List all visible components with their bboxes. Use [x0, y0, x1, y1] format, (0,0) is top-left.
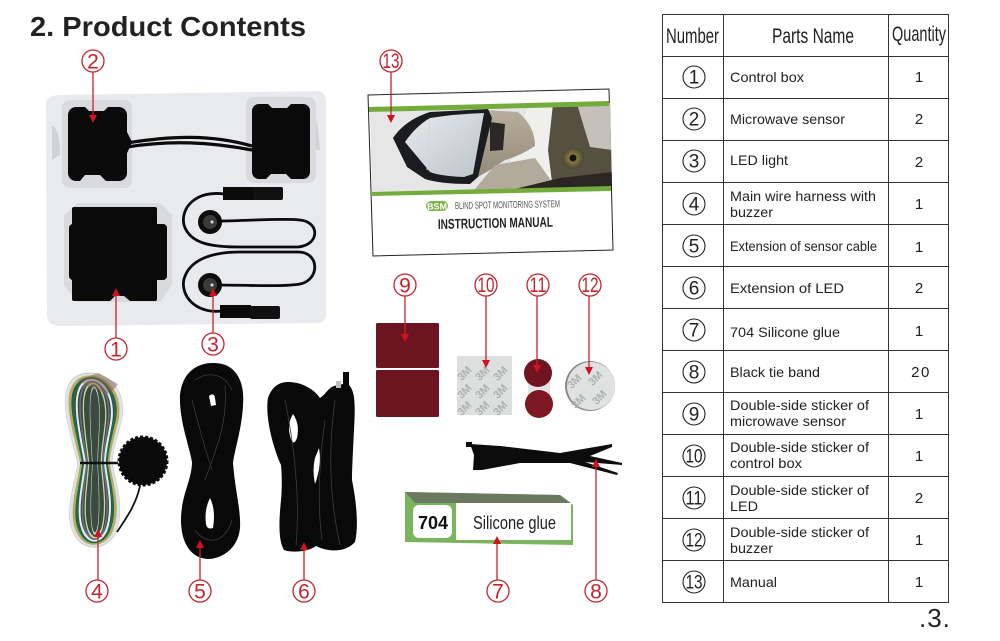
callout 1: 1 [110, 338, 122, 362]
manual sheet [368, 89, 613, 256]
callout 2 [82, 50, 104, 74]
parts name column: Double-side sticker of [730, 482, 869, 498]
callout 9: 9 [399, 274, 411, 298]
numbered callouts [82, 50, 607, 604]
sticker 10: double-side sticker for control box: 3M [491, 364, 511, 384]
arrow 2 [89, 72, 97, 123]
sticker 10: double-side sticker for control box [455, 356, 512, 419]
BSM badge: BSM [427, 201, 447, 212]
part: microwave sensor pair [68, 104, 310, 181]
number column: 5 [689, 236, 699, 258]
number column: 10 [686, 446, 702, 468]
parts name column: Double-side sticker of [730, 397, 869, 413]
number column: 4 [689, 194, 700, 216]
arrow 13 [387, 72, 395, 123]
sticker 12: double-side sticker for buzzer [565, 361, 615, 412]
arrow 9 [401, 296, 409, 342]
number column: 6 [689, 278, 699, 300]
leader arrows [89, 72, 600, 580]
sticker 10: double-side sticker for control box: 3M [473, 399, 493, 419]
sticker 10: double-side sticker for control box: 3M [455, 399, 475, 419]
quantity column [911, 69, 931, 591]
callout 13: 13 [382, 50, 400, 73]
panel: instruction manual [365, 89, 615, 256]
704 panel: 704 [418, 513, 448, 533]
arrow 6 [300, 542, 308, 580]
sticker 10: double-side sticker for control box: 3M [473, 364, 493, 384]
sticker 10: double-side sticker for control box: 3M [455, 382, 475, 402]
arrow 11 [533, 296, 541, 373]
quantity column: 1 [915, 448, 923, 465]
table grid [662, 14, 948, 602]
quantity column: 2 [915, 154, 923, 171]
part 8: black tie bands [466, 442, 622, 475]
callout 4: 4 [91, 580, 103, 604]
sticker 12: double-side sticker for buzzer: 3M [565, 372, 585, 392]
callout 6: 6 [298, 580, 310, 604]
parts name column: buzzer [730, 204, 773, 220]
callout 8 [585, 580, 607, 604]
parts name column: Extension of LED [730, 280, 844, 296]
table header: Quantity [892, 23, 946, 46]
quantity column: 20 [911, 364, 931, 381]
sticker 10: double-side sticker for control box: 3M [473, 382, 493, 402]
part 7: 704 silicone glue box [405, 492, 573, 545]
callout 5 [189, 580, 211, 604]
sticker 11: double-side sticker for LED [524, 359, 553, 418]
table header: Number [666, 25, 719, 48]
quantity column: 1 [915, 69, 923, 86]
parts name column: Double-side sticker of [730, 439, 869, 455]
callout 12: 12 [582, 274, 598, 297]
quantity column: 1 [915, 239, 923, 256]
parts name column: Black tie band [730, 364, 820, 380]
parts name column: Manual [730, 574, 777, 590]
title: 2. Product Contents [30, 11, 306, 42]
sticker 10: double-side sticker for control box: 3M [491, 382, 511, 402]
part 4: main wire harness with buzzer [67, 373, 167, 545]
callout 8: 8 [590, 580, 602, 604]
callout 7: 7 [492, 580, 504, 604]
white tray [46, 91, 326, 326]
part 6: extension of LED [267, 372, 357, 552]
sticker 12: double-side sticker for buzzer: 3M [590, 388, 610, 408]
arrow 12 [585, 296, 593, 375]
parts name column: control box [730, 455, 802, 471]
arrow 8 [592, 459, 600, 580]
parts name column [730, 69, 877, 590]
sticker 10: double-side sticker for control box: 3M [491, 399, 511, 419]
manual green bands [369, 101, 609, 112]
parts name column: buzzer [730, 540, 773, 556]
callout 3 [202, 333, 224, 356]
parts name column: microwave sensor [730, 413, 846, 429]
parts name column: Extension of sensor cable [730, 238, 877, 254]
callout 11: 11 [530, 274, 546, 297]
label panel: Silicone glue [473, 513, 556, 533]
parts name column: 704 Silicone glue [730, 324, 840, 340]
callout 5: 5 [194, 580, 206, 604]
parts name column: Double-side sticker of [730, 524, 869, 540]
manual subtitle: BLIND SPOT MONITORING SYSTEM [455, 199, 560, 212]
quantity column: 2 [915, 490, 923, 507]
704 panel [413, 505, 452, 538]
callout 6 [293, 580, 315, 604]
parts name column: Control box [730, 69, 804, 85]
page number: .3. [919, 603, 951, 633]
arrow 3 [209, 288, 217, 333]
arrow 1 [112, 288, 120, 338]
parts name column: LED [730, 498, 758, 514]
quantity column: 2 [915, 280, 923, 297]
arrow 10 [482, 296, 490, 368]
number column: 12 [686, 530, 702, 552]
arrow 7 [493, 536, 501, 580]
manual heading: INSTRUCTION MANUAL [438, 214, 553, 232]
callout 7 [487, 580, 509, 604]
callout 10: 10 [478, 274, 494, 297]
callout 3: 3 [207, 334, 219, 356]
callout 4 [86, 580, 108, 604]
quantity column: 1 [915, 532, 923, 549]
manual photo [370, 103, 612, 192]
callout 1 [105, 338, 127, 362]
table header [666, 23, 946, 48]
panel: tray with control box, sensors and LEDs [46, 91, 326, 326]
sticker 12: double-side sticker for buzzer: 3M [586, 369, 606, 389]
quantity column: 1 [915, 574, 923, 591]
number column: 9 [689, 404, 699, 426]
number column: 11 [686, 488, 702, 510]
sticker 10: double-side sticker for control box: 3M [455, 364, 475, 384]
sticker 12: double-side sticker for buzzer: 3M [569, 392, 589, 412]
callout 2: 2 [87, 50, 99, 74]
number column: 8 [689, 362, 699, 384]
parts name column: Microwave sensor [730, 111, 845, 127]
number column: 13 [686, 572, 702, 594]
parts name column: Main wire harness with [730, 188, 876, 204]
callout 9 [394, 274, 416, 298]
number column: 2 [689, 110, 699, 130]
number column: 3 [689, 152, 699, 172]
quantity column: 1 [915, 406, 923, 423]
number column: 7 [689, 320, 699, 342]
panel: parts table [662, 14, 948, 602]
number column: 1 [689, 68, 699, 88]
part: LED lights with cables [183, 187, 315, 319]
sticker 9: double-side sticker for sensor [376, 323, 439, 417]
quantity column: 1 [915, 323, 923, 340]
arrow 4 [94, 529, 102, 580]
arrow 5 [196, 540, 204, 580]
label panel [456, 503, 571, 540]
part: control box [69, 207, 167, 301]
quantity column: 2 [915, 111, 923, 128]
table header: Parts Name [772, 25, 854, 48]
quantity column: 1 [915, 196, 923, 213]
part 5: extension of sensor cable [180, 363, 243, 559]
parts name column: LED light [730, 152, 788, 168]
number column [683, 66, 705, 594]
